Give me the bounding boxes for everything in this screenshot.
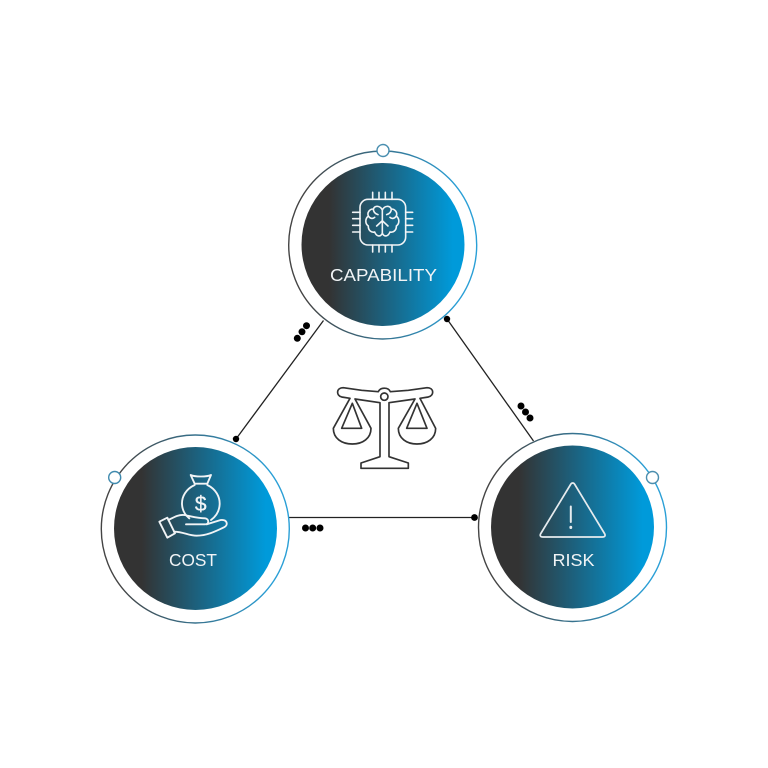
outer ring: cost (101, 435, 289, 623)
label: capability: CAPABILITY (330, 265, 437, 285)
panel: capability (289, 144, 477, 339)
handle: risk ring (646, 472, 658, 484)
handle: capability ring (377, 144, 389, 156)
label: risk: RISK (552, 550, 595, 570)
icon: dollar sign: $ (195, 493, 207, 516)
icon: balance scales (333, 388, 436, 468)
handle: cost ring (109, 472, 121, 484)
disc: cost (114, 447, 277, 610)
label: cost: COST (169, 550, 217, 570)
dots: left connector (294, 322, 310, 342)
icon: warning triangle (540, 483, 605, 537)
icon: hand holding money bag (159, 475, 227, 538)
outer ring: capability (289, 151, 477, 339)
icon: brain chip (353, 192, 413, 252)
connector: cost to risk (289, 514, 478, 521)
dots: right connector (518, 402, 534, 422)
panel: risk (478, 434, 666, 622)
dots: bottom connector (302, 524, 324, 532)
outer ring: risk (478, 434, 666, 622)
connector: capability to risk (444, 316, 534, 441)
panel: cost (101, 435, 289, 623)
connector: capability to cost (233, 320, 324, 442)
disc: capability (302, 163, 464, 326)
disc: risk (491, 446, 654, 608)
